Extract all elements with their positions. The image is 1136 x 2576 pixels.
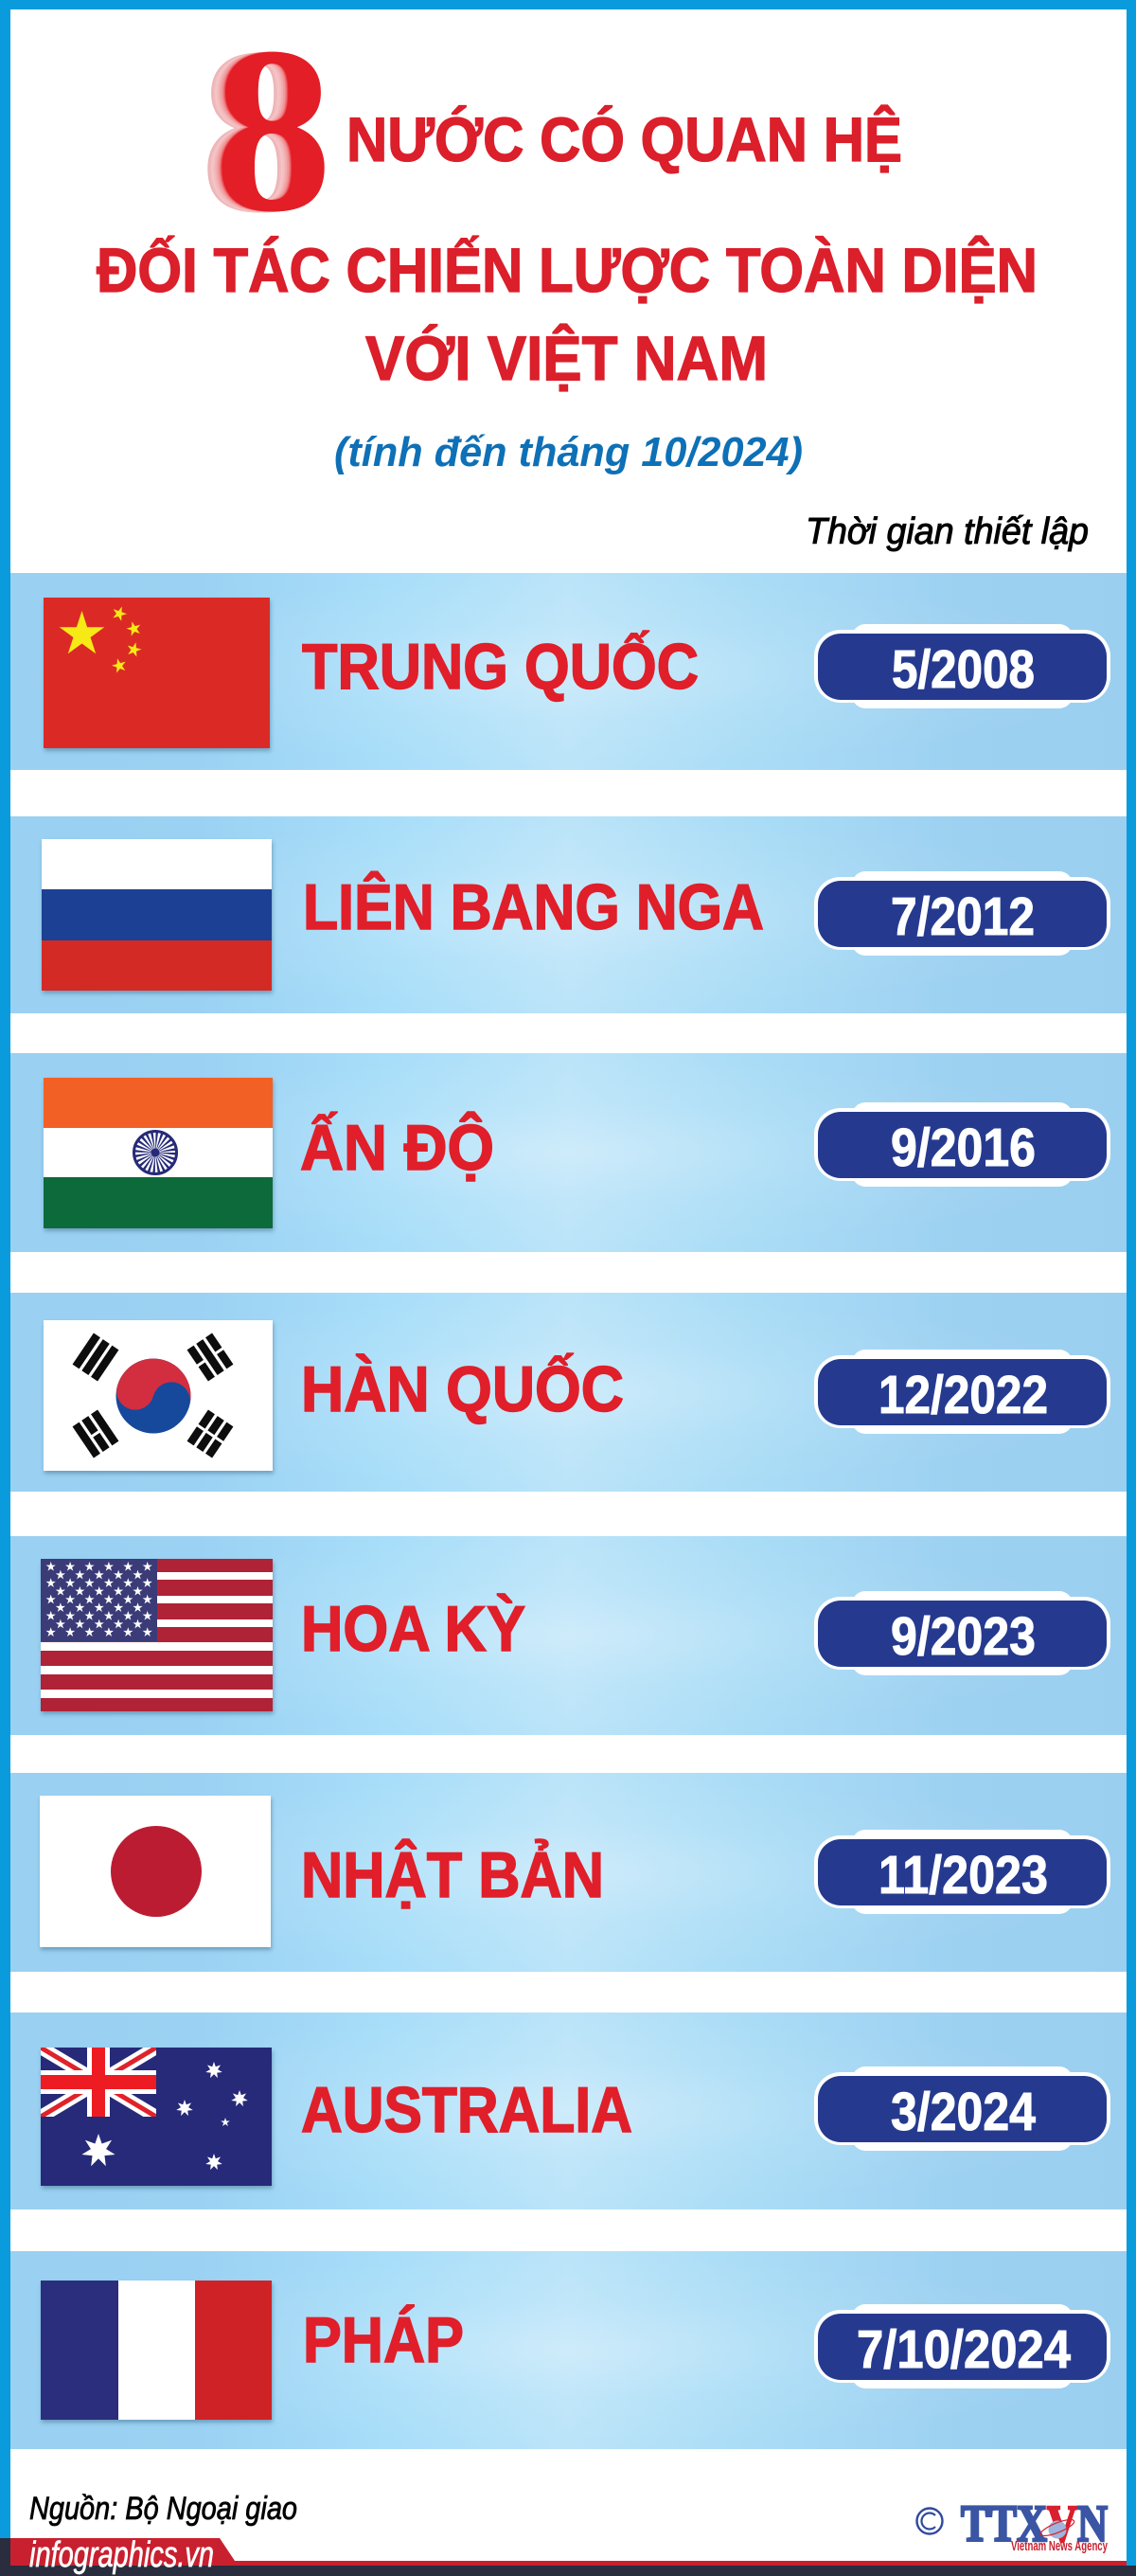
subtitle: (tính đến tháng 10/2024) xyxy=(334,429,803,475)
title line 2: ĐỐI TÁC CHIẾN LƯỢC TOÀN DIỆN xyxy=(97,235,1038,305)
date badge: 5/2008 xyxy=(892,639,1035,700)
date badge xyxy=(814,624,1110,708)
country name: TRUNG QUỐC xyxy=(302,630,699,703)
flag: France xyxy=(41,2281,272,2420)
flag: South Korea xyxy=(44,1320,273,1471)
date badge xyxy=(814,2066,1110,2151)
row: Japan xyxy=(10,1773,1127,1972)
flag: United States xyxy=(41,1559,273,1711)
country name: LIÊN BANG NGA xyxy=(303,870,764,943)
row: Russia xyxy=(10,816,1127,1013)
flag: Russia xyxy=(42,839,272,991)
row: India xyxy=(10,1053,1127,1252)
row: China xyxy=(10,573,1127,770)
flag: China xyxy=(44,598,270,748)
row: United States xyxy=(10,1536,1127,1735)
date badge: 12/2022 xyxy=(879,1365,1048,1425)
country name: HÀN QUỐC xyxy=(301,1352,624,1425)
footer bar xyxy=(0,2535,1136,2576)
title line 1: NƯỚC CÓ QUAN HỆ xyxy=(346,104,902,174)
date badge: 9/2023 xyxy=(891,1606,1036,1667)
date badge: 7/10/2024 xyxy=(857,2319,1071,2380)
source note: Nguồn: Bộ Ngoại giao xyxy=(29,2491,297,2527)
country name: PHÁP xyxy=(303,2304,464,2376)
country name: HOA KỲ xyxy=(301,1593,525,1665)
column heading: Thời gian thiết lập xyxy=(806,511,1089,552)
date badge: 9/2016 xyxy=(891,1118,1036,1178)
row: Australia xyxy=(10,2012,1127,2209)
date badge xyxy=(814,1591,1110,1675)
footer bar: infographics.vn xyxy=(29,2535,214,2575)
country name: AUSTRALIA xyxy=(301,2074,632,2146)
date badge xyxy=(814,1350,1110,1434)
date badge xyxy=(814,2304,1110,2388)
title line 3: VỚI VIỆT NAM xyxy=(365,323,768,393)
flag: Japan xyxy=(40,1796,271,1947)
date badge: 3/2024 xyxy=(891,2082,1036,2142)
row: France xyxy=(10,2251,1127,2449)
date badge: 7/2012 xyxy=(891,886,1035,947)
date badge xyxy=(814,1102,1110,1187)
date badge xyxy=(814,1830,1110,1914)
date badge xyxy=(814,871,1110,956)
logo: TTXVN: TTXVN xyxy=(961,2495,1108,2552)
country name: NHẬT BẢN xyxy=(301,1838,604,1911)
row: South Korea xyxy=(10,1293,1127,1492)
country name: ẤN ĐỘ xyxy=(300,1111,494,1184)
flag: Australia xyxy=(41,2048,272,2186)
flag: India xyxy=(44,1078,273,1228)
big number 8: 8 xyxy=(214,0,332,261)
date badge: 11/2023 xyxy=(879,1845,1048,1905)
